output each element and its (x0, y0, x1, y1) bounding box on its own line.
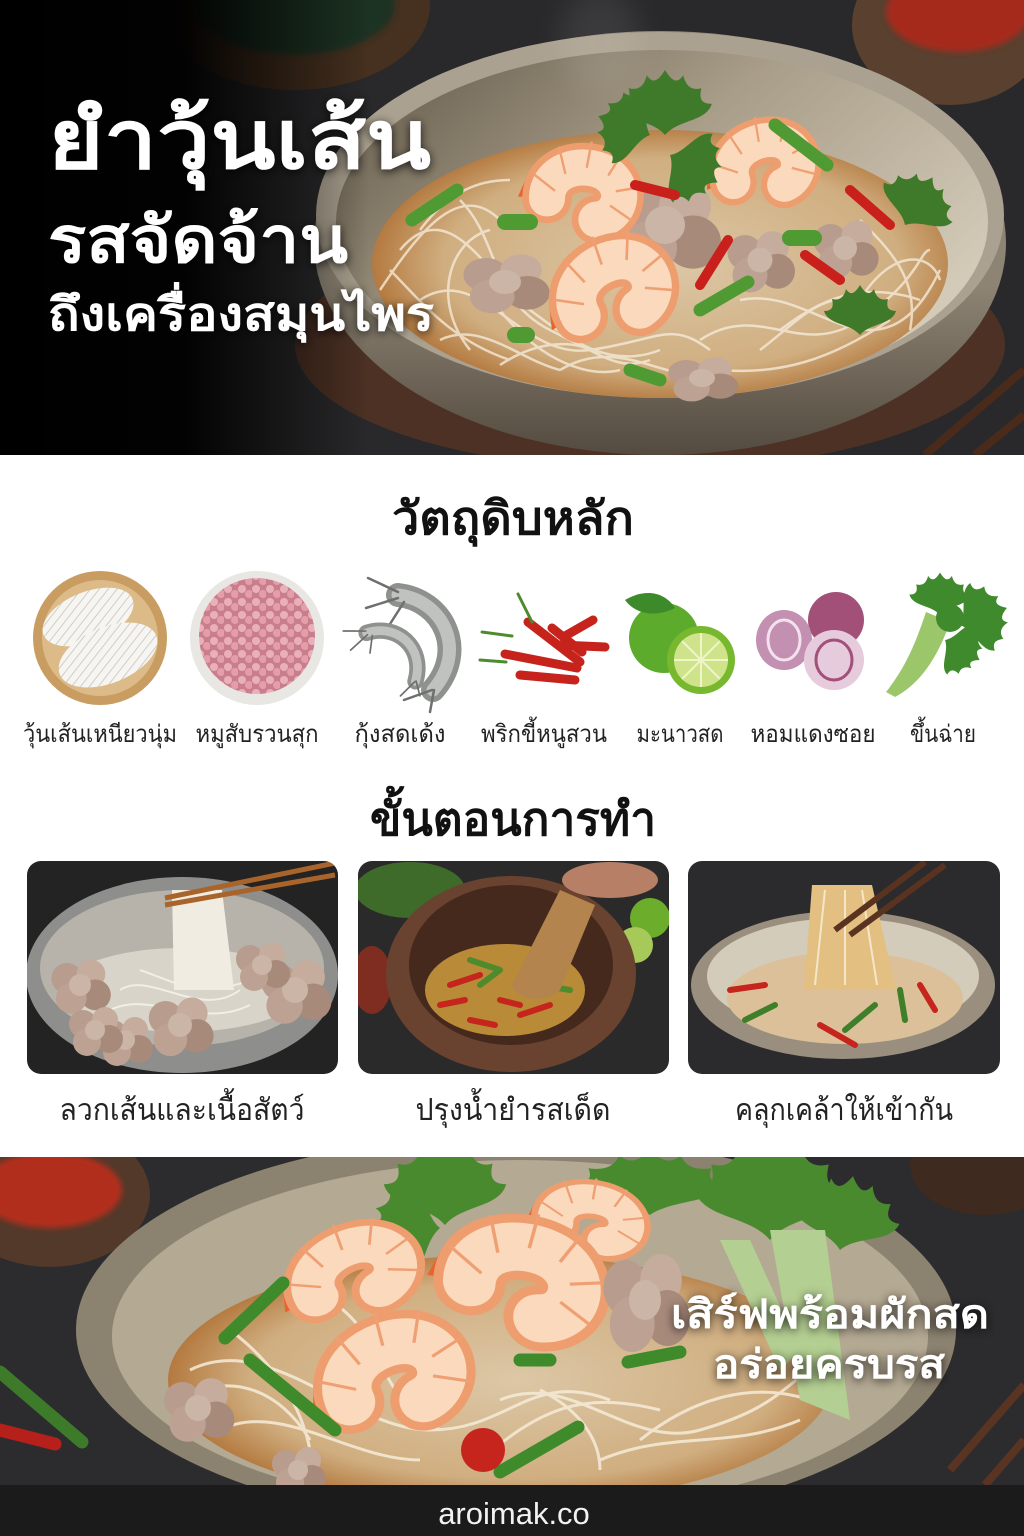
step captions (60, 1088, 953, 1129)
ingredient labels (23, 716, 976, 749)
step captions: คลุกเคล้าให้เข้ากัน (735, 1093, 953, 1129)
step 3 photo: tossing salad (688, 861, 1000, 1074)
chopsticks (950, 1385, 1024, 1485)
serving caption: เสิร์ฟพร้อมผักสด (671, 1292, 989, 1337)
chopsticks (925, 370, 1024, 455)
ingredient: minced pork (190, 571, 324, 705)
wooden plate under bowl (295, 295, 1005, 455)
shrimp (518, 127, 650, 229)
ingredient: shallots (756, 592, 864, 690)
step captions: ลวกเส้นและเนื้อสัตว์ (60, 1088, 304, 1127)
left dark gradient (0, 0, 358, 455)
step 2 photo: pounding dressing (352, 861, 670, 1074)
ingredient labels: ขึ้นฉ่าย (910, 716, 976, 748)
right-side bowl (910, 1157, 1024, 1215)
ingredients row (33, 571, 1019, 714)
heading: steps: ขั้นตอนการทำ (370, 785, 656, 845)
pork (603, 1254, 690, 1352)
minced pork (463, 254, 550, 313)
corner bowl top left with herbs (228, 0, 430, 90)
serving caption (671, 1292, 989, 1387)
bottom serving photo (0, 1157, 1024, 1485)
shrimp (284, 1218, 426, 1323)
hero title (48, 95, 434, 343)
serving bowl (76, 1157, 956, 1485)
noodles and broth (372, 130, 948, 398)
chilli bowl (0, 1157, 150, 1267)
ingredient labels: หมูสับรวนสุก (196, 721, 318, 749)
ingredient labels: กุ้งสดเด้ง (354, 721, 446, 749)
steam (562, 0, 638, 78)
ingredient labels: หอมแดงซอย (750, 721, 876, 748)
whole chillies (0, 1372, 82, 1442)
herb leaf garnish (585, 70, 967, 335)
heading: ingredients: วัตถุดิบหลัก (392, 492, 634, 547)
herbs (376, 1157, 900, 1256)
step 1 photo: boiling noodles (26, 861, 338, 1074)
ingredient: chillies (480, 594, 605, 680)
main bowl (314, 31, 1006, 455)
step captions: ปรุงน้ำยำรสเด็ด (416, 1088, 610, 1129)
ingredient: celery (886, 572, 1019, 697)
corner bowl top right (852, 0, 1024, 105)
ingredient labels: วุ้นเส้นเหนียวนุ่ม (23, 721, 177, 749)
footer brand text: aroimak.co (438, 1496, 590, 1531)
title line 3: ถึงเครื่องสมุนไพร (48, 282, 434, 343)
title line 1: ยำวุ้นเส้น (48, 95, 431, 191)
hero photo panel (0, 0, 1024, 470)
green onion and chilli pieces (412, 125, 890, 380)
footer bar (0, 1485, 1024, 1536)
ingredient labels: มะนาวสด (636, 721, 724, 748)
ingredient: limes (625, 593, 735, 694)
ingredient labels: พริกขี้หนูสวน (481, 716, 607, 749)
serving caption: อร่อยครบรส (713, 1343, 946, 1387)
ingredient: glass noodles (33, 571, 167, 705)
ingredient: shrimp (342, 578, 449, 714)
title line 2: รสจัดจ้าน (48, 204, 348, 276)
